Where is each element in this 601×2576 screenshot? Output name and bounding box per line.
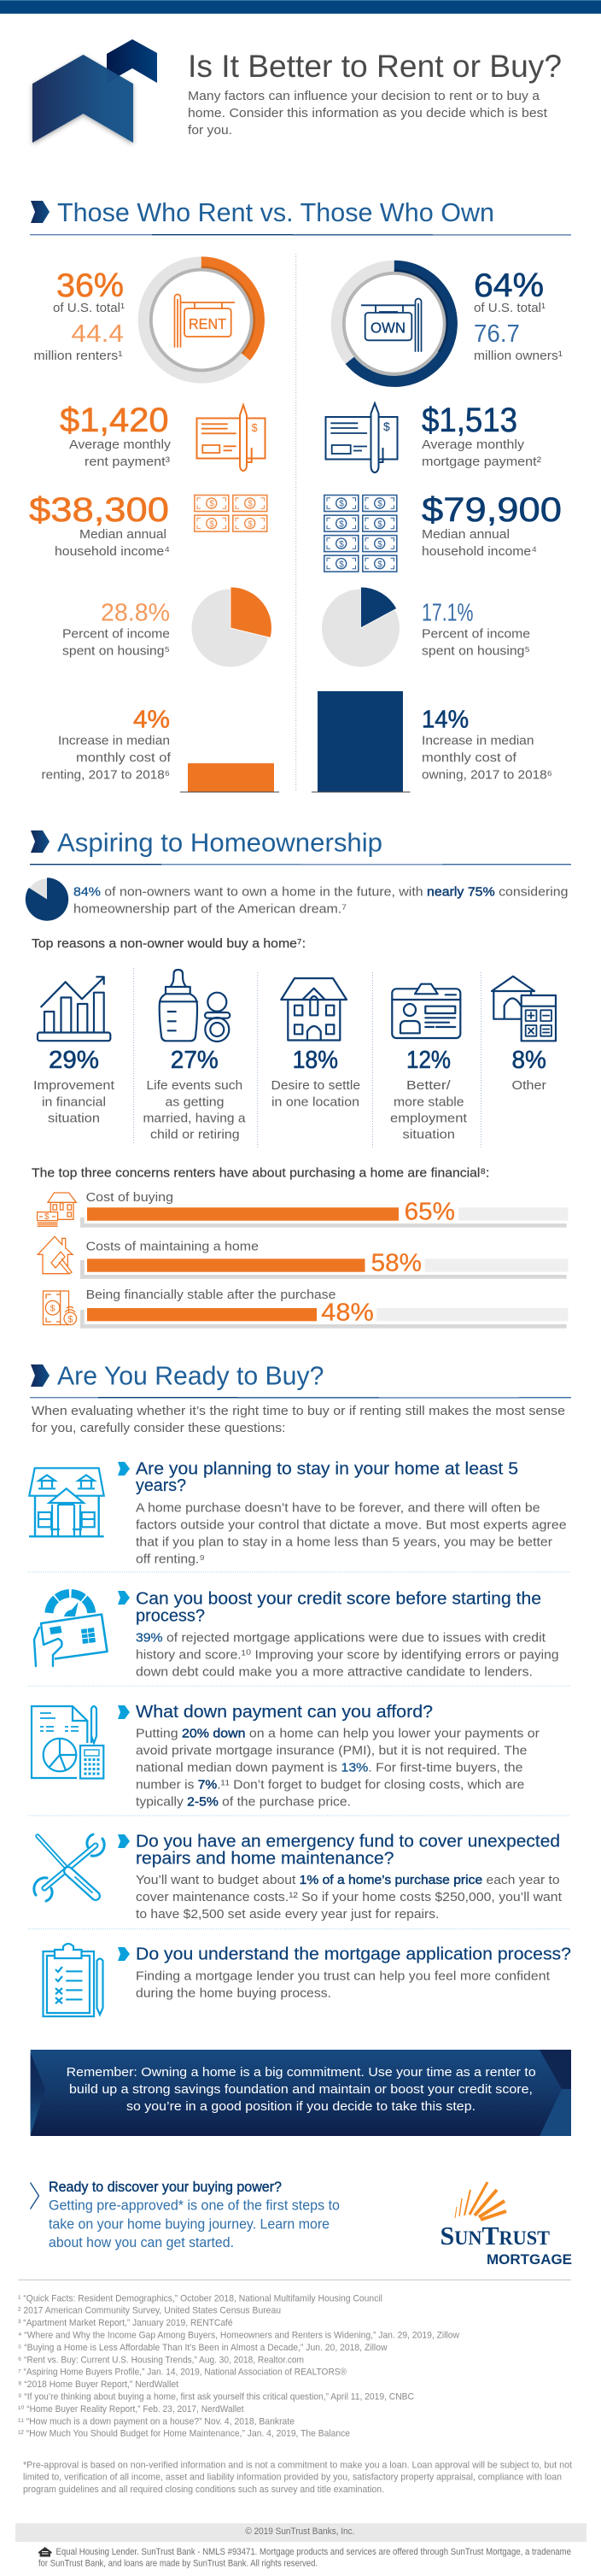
- panel: renter income: $38,300: [29, 491, 169, 529]
- intro text: home. Consider this information as you decide which is best: [188, 106, 548, 120]
- reason: employment: employment: [390, 1111, 468, 1125]
- pie chart: 17.1%: [322, 587, 400, 666]
- bar: financially stable: [43, 1288, 569, 1329]
- question 4: emergency fund: You’ll want to budget about 1% of a home’s purchase price each year to: [136, 1873, 560, 1887]
- footnotes: ¹² “How Much You Should Budget for Home Maintenance,” Jan. 4, 2019, The Balance: [18, 2429, 350, 2439]
- question 2: credit score: [34, 1590, 559, 1680]
- panel: owner income: Median annual: [422, 527, 510, 542]
- icon: four dollar bills: $: [248, 500, 253, 509]
- question 4: emergency fund: [34, 1833, 563, 1922]
- section heading: rent vs own: Those Who Rent vs. Those Who Own: [57, 197, 494, 227]
- icon: cash and coins: $: [67, 1314, 73, 1324]
- panel: owner income share: spent on housing⁵: [422, 644, 530, 659]
- call to action: [31, 2179, 340, 2250]
- icon: eight dollar bills: $: [377, 519, 382, 529]
- panel: owning cost increase: [312, 691, 552, 793]
- question 2: credit score: down debt could make you a more attractive candidate to lenders.: [136, 1665, 533, 1680]
- reason: financial situation: situation: [48, 1111, 100, 1125]
- reason: settle in one location: 18%: [293, 1047, 338, 1074]
- question 2: credit score: Can you boost your credit score before starting the: [136, 1590, 541, 1609]
- panel: renter income: [29, 491, 267, 559]
- icon: bottle and pacifier: [160, 970, 230, 1042]
- panel: owner income: [324, 491, 562, 572]
- question 4: emergency fund: repairs and home maintenance?: [136, 1850, 394, 1869]
- call to action: about how you can get started.: [49, 2234, 234, 2250]
- icon: four dollar bills: $: [248, 519, 253, 529]
- panel: renting cost increase: monthly cost of: [76, 751, 172, 766]
- divider between rent and own: [295, 254, 297, 790]
- panel: renter income: Median annual: [79, 527, 166, 542]
- panel: mortgage payment: Average monthly: [422, 437, 525, 452]
- reason: life events: as getting: [166, 1094, 224, 1109]
- icon: document, pie, calculator: [32, 1706, 103, 1779]
- logo: house chevrons: [32, 39, 157, 143]
- callout banner: remember: [31, 2050, 571, 2136]
- bar: 14%: [312, 691, 410, 793]
- intro: when evaluating: When evaluating whether it’s the right time to buy or if renting still makes the most sense: [32, 1404, 565, 1418]
- bar: costs of maintaining: [38, 1236, 569, 1279]
- question 3: down payment: typically 2-5% of the purchase price.: [136, 1794, 351, 1809]
- question 2: credit score: 39% of rejected mortgage applications were due to issues with credit: [136, 1631, 546, 1646]
- reason: financial situation: Improvement: [33, 1078, 115, 1093]
- reason: financial situation: 29%: [49, 1047, 99, 1074]
- panel: owning cost increase: monthly cost of: [422, 751, 517, 766]
- panel: owning cost increase: 14%: [422, 707, 469, 734]
- reason: settle in one location: Desire to settle: [271, 1078, 360, 1093]
- panel: owners share: [336, 266, 563, 381]
- icon: own sign: OWN: [371, 319, 406, 336]
- section heading: rent vs own: [30, 197, 571, 236]
- question 4: emergency fund: cover maintenance costs.¹² So if your home costs $250,000, you’ll want: [136, 1890, 563, 1904]
- intro text: Many factors can influence your decision to rent or to buy a: [188, 89, 540, 103]
- logo: suntrust mortgage: MORTGAGE: [487, 2251, 572, 2268]
- footnotes: ¹¹ “How much is a down payment on a house?” Nov. 4, 2018, Bankrate: [18, 2416, 295, 2426]
- icon: id badge: [392, 984, 460, 1038]
- panel: renter income share: 28.8%: [101, 600, 170, 627]
- call to action: Ready to discover your buying power?: [49, 2179, 282, 2195]
- reason: employment: Better/: [406, 1078, 452, 1093]
- bar: cost of buying: [38, 1190, 569, 1228]
- icon: four dollar bills: [195, 496, 267, 531]
- icon: bar chart with arrow: [38, 977, 110, 1041]
- footnotes: ⁶ “Rent vs. Buy: Current U.S. Housing Trends,” Aug. 30, 2018, Realtor.com: [18, 2355, 304, 2365]
- reason: employment: [390, 984, 468, 1141]
- icon: eight dollar bills: $: [339, 500, 344, 509]
- footer: copyright bar: © 2019 SunTrust Banks, Inc.: [245, 2526, 354, 2537]
- icon: eight dollar bills: $: [339, 540, 344, 549]
- icon: eight dollar bills: [324, 496, 397, 572]
- panel: renter income share: Percent of income: [62, 627, 170, 642]
- footnotes: ³ “Apartment Market Report,” January 2019, RENTCafé: [18, 2318, 233, 2328]
- footnotes: ⁴ “Where and Why the Income Gap Among Buyers, Homeowners and Renters is Widening,” Jan. 29, 2019, Zillow: [18, 2331, 459, 2341]
- question 3: down payment: national median down payment is 13%. For first-time buyers, the: [136, 1760, 522, 1775]
- icon: eight dollar bills: $: [339, 519, 344, 529]
- question 4: emergency fund: to have $2,500 set aside every year just for repairs.: [136, 1907, 439, 1922]
- title: Is It Better to Rent or Buy?: [188, 48, 562, 84]
- panel: owner income share: [322, 587, 530, 666]
- icon: eight dollar bills: $: [339, 560, 344, 569]
- panel: owning cost increase: Increase in median: [422, 734, 534, 748]
- text: 84% of non-owners: 84% of non-owners want to own a home in the future, with nearly 75% considering: [73, 884, 569, 899]
- question 1: stay 5 years: that if you plan to stay in a home less than 5 years, you may be better: [136, 1534, 552, 1549]
- donut: 64% own: [336, 266, 452, 381]
- footer: equal housing lender: [38, 2547, 571, 2569]
- reason: settle in one location: in one location: [271, 1094, 359, 1109]
- logo: suntrust mortgage: [441, 2182, 572, 2268]
- panel: renters share: 36%: [56, 267, 124, 304]
- panel: rent payment: [60, 402, 265, 471]
- bar: 4%: [180, 763, 279, 793]
- donut: 36% rent: [143, 262, 259, 378]
- subheading: top reasons: Top reasons a non-owner would buy a home⁷:: [32, 936, 306, 951]
- panel: mortgage payment: $1,513: [422, 402, 517, 439]
- panel: renters share: million renters¹: [34, 349, 123, 363]
- top bar: [0, 0, 601, 14]
- icon: rent sign: [174, 294, 235, 348]
- section heading: aspiring to homeownership: [30, 828, 571, 866]
- icon: eight dollar bills: $: [377, 500, 382, 509]
- question 1: stay 5 years: factors outside your control that dictate a move. But most experts agree: [136, 1517, 567, 1532]
- footer: equal housing lender: for SunTrust Bank, and loans are made by SunTrust Bank. All rights reserved.: [38, 2559, 318, 2569]
- panel: owner income: $79,900: [422, 491, 562, 529]
- text: 84% of non-owners: homeownership part of the American dream.⁷: [73, 901, 347, 916]
- question 3: down payment: number is 7%.¹¹ Don’t forget to budget for closing costs, which are: [136, 1777, 524, 1792]
- footnotes: ² 2017 American Community Survey, United States Census Bureau: [18, 2306, 281, 2316]
- panel: renting cost increase: Increase in median: [58, 734, 170, 748]
- icon: four dollar bills: $: [209, 500, 214, 509]
- disclaimer: *Pre-approval is based on non-verified information and is not a commitment to make you a loan. Loan approval will be subject to, but not: [23, 2460, 572, 2470]
- reason: financial situation: [33, 977, 115, 1125]
- footnotes: ⁹ “If you’re thinking about buying a home, first ask yourself this critical question,” April 11, 2019, CNBC: [18, 2392, 414, 2403]
- question 3: down payment: Putting 20% down on a home can help you lower your payments or: [136, 1726, 540, 1740]
- reason: other: [492, 977, 556, 1093]
- icon: house and cash: $: [44, 1212, 50, 1222]
- footnotes: ¹⁰ “Home Buyer Reality Report,” Feb. 23, 2017, NerdWallet: [18, 2404, 244, 2415]
- reason: settle in one location: [271, 978, 360, 1109]
- icon: house and cash: [38, 1193, 76, 1226]
- subheading: top three concerns: The top three concerns renters have about purchasing a home are financial⁸:: [32, 1166, 489, 1181]
- question 5: application process: [43, 1944, 571, 2016]
- question 5: application process: during the home buying process.: [136, 1986, 331, 2000]
- icon: check and pen: [196, 405, 265, 471]
- disclaimer: limited to, verification of all income, asset and liability information provided by you, satisfactory property appraisal, compliance with loan: [23, 2473, 562, 2483]
- footer: copyright bar: [15, 2523, 586, 2542]
- question 1: stay 5 years: years?: [136, 1476, 186, 1495]
- reason: other: 8%: [512, 1047, 546, 1074]
- question 5: application process: Do you understand the mortgage application process?: [136, 1945, 571, 1963]
- panel: renter income share: spent on housing⁵: [62, 644, 170, 659]
- reason: financial situation: in financial: [42, 1094, 106, 1109]
- panel: renters share: [34, 262, 259, 378]
- callout banner: remember: build up a strong savings foundation and maintain or boost your credit score,: [69, 2082, 533, 2097]
- callout banner: remember: Remember: Owning a home is a big commitment. Use your time as a renter to: [67, 2065, 536, 2080]
- bar: financially stable: 48%: [321, 1299, 374, 1326]
- intro: when evaluating: [32, 1404, 565, 1435]
- callout banner: remember: so you’re in a good position if you decide to take this step.: [126, 2099, 476, 2114]
- question 3: down payment: What down payment can you afford?: [136, 1703, 433, 1722]
- panel: owning cost increase: owning, 2017 to 2018⁶: [422, 768, 552, 783]
- bar: cost of buying: Cost of buying: [86, 1190, 173, 1205]
- panel: owner income share: 17.1%: [422, 600, 473, 627]
- panel: renters share: 44.4: [72, 320, 124, 348]
- bar: costs of maintaining: 58%: [371, 1250, 422, 1277]
- footnotes: ⁷ “Aspiring Home Buyers Profile,” Jan. 14, 2019, National Association of REALTORS®: [18, 2368, 347, 2378]
- reason: employment: 12%: [406, 1047, 451, 1074]
- call to action: take on your home buying journey. Learn more: [49, 2215, 330, 2232]
- panel: rent payment: Average monthly: [69, 437, 172, 452]
- panel: rent payment: rent payment³: [85, 455, 170, 469]
- panel: renting cost increase: [41, 707, 279, 793]
- question 4: emergency fund: Do you have an emergency fund to cover unexpected: [136, 1833, 560, 1851]
- panel: rent payment: $1,420: [60, 402, 169, 439]
- reason: life events: Life events such: [147, 1078, 242, 1093]
- section heading: are you ready to buy: [30, 1361, 571, 1399]
- icon: cash and coins: [43, 1291, 77, 1325]
- panel: owners share: 64%: [474, 267, 544, 304]
- footnotes: [18, 2293, 459, 2439]
- icon: own sign: [361, 299, 422, 352]
- intro text: [188, 89, 548, 138]
- panel: renting cost increase: renting, 2017 to 2018⁶: [41, 768, 170, 783]
- intro text: for you.: [188, 123, 232, 138]
- bar: cost of buying: 65%: [405, 1199, 455, 1226]
- question 5: application process: Finding a mortgage lender you trust can help you feel more confident: [136, 1969, 551, 1983]
- question 1: stay 5 years: A home purchase doesn’t have to be forever, and there will often be: [136, 1500, 540, 1515]
- question 1: stay 5 years: off renting.⁹: [136, 1552, 205, 1566]
- panel: owners share: 76.7: [474, 320, 520, 348]
- panel: owners share: of U.S. total¹: [474, 301, 546, 315]
- reason: life events: [143, 970, 246, 1141]
- logo: suntrust mortgage: SUNTRUST: [441, 2221, 550, 2250]
- panel: owners share: million owners¹: [474, 349, 563, 363]
- question 2: credit score: history and score.¹⁰ Improving your score by identifying errors or paying: [136, 1648, 559, 1663]
- icon: clipboard: [43, 1944, 102, 2016]
- panel: renter income share: [62, 587, 271, 666]
- question 3: down payment: avoid private mortgage insurance (PMI), but it is not required. The: [136, 1743, 527, 1757]
- section heading: aspiring to homeownership: Aspiring to Homeownership: [57, 828, 382, 858]
- footnotes: ⁸ “2018 Home Buyer Report,” NerdWallet: [18, 2379, 178, 2390]
- icon: house: [281, 978, 347, 1041]
- disclaimer: [23, 2460, 572, 2495]
- bar: costs of maintaining: Costs of maintaining a home: [86, 1239, 259, 1253]
- footnotes: ¹ “Quick Facts: Resident Demographics,” October 2018, National Multifamily Housing Council: [18, 2293, 382, 2303]
- disclaimer: program guidelines and all required closing conditions such as survey and title examination.: [23, 2485, 384, 2495]
- panel: renter income: household income⁴: [55, 544, 170, 559]
- reason: employment: more stable: [394, 1094, 464, 1109]
- panel: owner income: household income⁴: [422, 544, 537, 559]
- panel: owner income share: Percent of income: [422, 627, 530, 642]
- column dividers: [134, 968, 481, 1147]
- icon: colonial house: [29, 1468, 104, 1536]
- pie chart: 28.8%: [191, 587, 271, 666]
- footnotes: ⁵ “Buying a Home is Less Affordable Than It’s Been in Almost a Decade,” Jun. 20, 2018, Zillow: [18, 2343, 388, 2353]
- icon: wrench and screwdriver: [34, 1834, 104, 1901]
- icon: four dollar bills: $: [209, 519, 214, 529]
- call to action: Getting pre-approved* is one of the first steps to: [49, 2198, 340, 2214]
- icon: check and pen: $: [383, 420, 390, 433]
- icon: check and pen: [326, 403, 398, 472]
- text: 84% of non-owners: [73, 884, 569, 916]
- icon: eight dollar bills: $: [377, 560, 382, 569]
- icon: credit card and gauge: [34, 1593, 108, 1666]
- question 2: credit score: process?: [136, 1606, 205, 1625]
- intro: when evaluating: for you, carefully consider these questions:: [32, 1421, 285, 1435]
- pie chart: 84%: [26, 877, 68, 921]
- reason: life events: 27%: [171, 1047, 219, 1074]
- reason: other: Other: [512, 1078, 546, 1093]
- icon: house and paint roller: [38, 1236, 73, 1274]
- icon: check and pen: $: [251, 421, 258, 434]
- panel: mortgage payment: mortgage payment²: [422, 455, 541, 469]
- question 3: down payment: [32, 1703, 540, 1809]
- section heading: are you ready to buy: Are You Ready to Buy?: [57, 1361, 324, 1391]
- bar: financially stable: Being financially stable after the purchase: [86, 1288, 336, 1302]
- icon: cash and coins: $: [50, 1304, 55, 1314]
- panel: renting cost increase: 4%: [133, 707, 170, 734]
- panel: mortgage payment: [326, 402, 541, 472]
- reason: employment: situation: [403, 1127, 455, 1141]
- icon: rent sign: RENT: [189, 315, 226, 332]
- question 1: stay 5 years: Are you planning to stay in your home at least 5: [136, 1460, 518, 1479]
- question 1: stay 5 years: [29, 1460, 567, 1566]
- icon: eight dollar bills: $: [377, 540, 382, 549]
- reason: life events: child or retiring: [150, 1127, 240, 1141]
- panel: renters share: of U.S. total¹: [53, 301, 125, 315]
- reason: life events: married, having a: [143, 1111, 246, 1125]
- icon: house and calculator: [492, 977, 556, 1041]
